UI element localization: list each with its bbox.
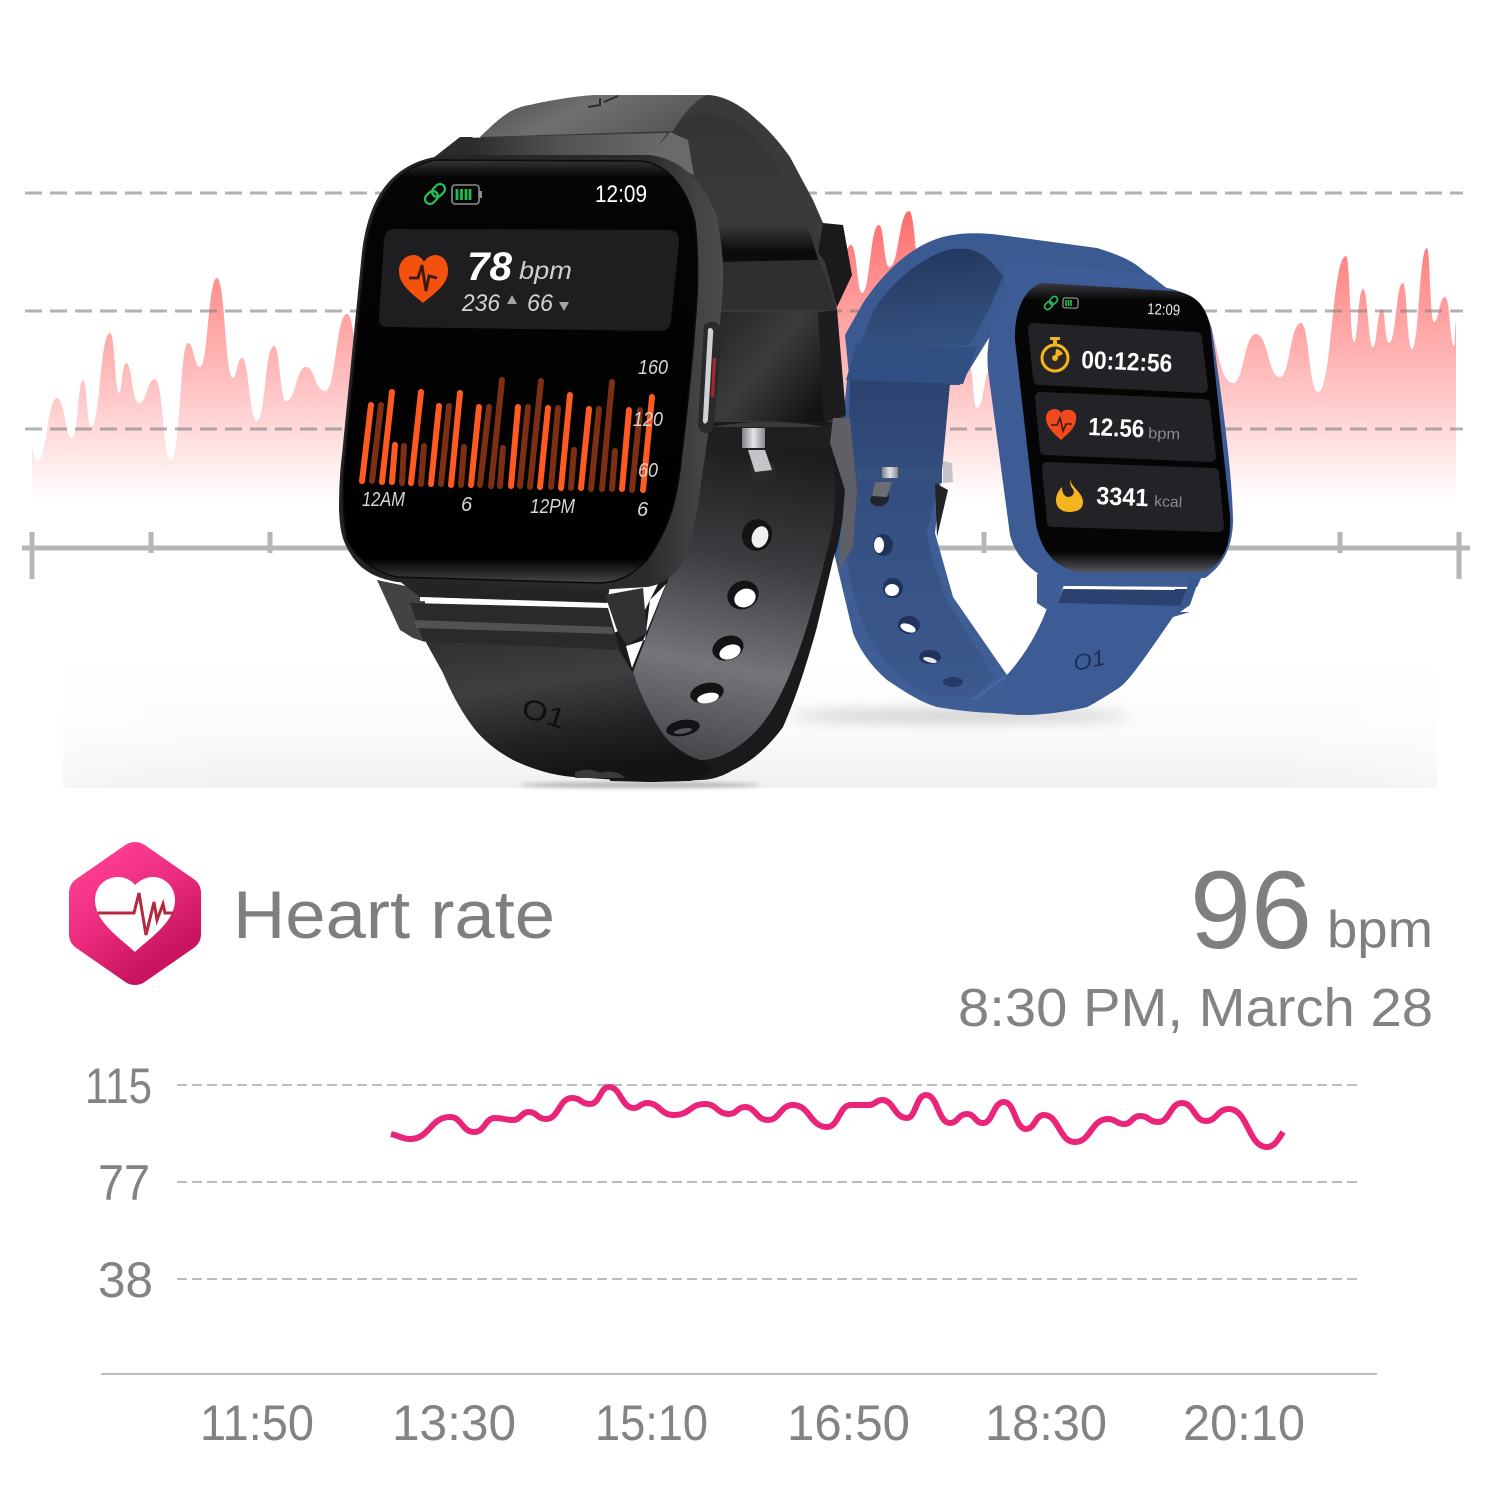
black strap: buckle holes	[665, 515, 777, 739]
heading: heart rate: Heart rate	[233, 877, 555, 953]
y axis labels: 77	[98, 1155, 150, 1211]
hexagon badge	[86, 859, 184, 968]
heart unit: bpm	[1148, 425, 1181, 443]
blue strap: front band below case	[990, 600, 1190, 715]
area: left section	[32, 278, 362, 502]
blue top lug	[1003, 262, 1175, 300]
blue strap: keeper loop	[846, 343, 977, 384]
x axis labels	[362, 489, 649, 521]
band gap	[420, 597, 608, 607]
strap bottom studs	[575, 770, 625, 778]
lug highlight	[414, 620, 614, 634]
x axis labels: 6	[461, 494, 473, 516]
panel: stopwatch	[1028, 323, 1208, 393]
x axis labels: 16:50	[787, 1395, 910, 1451]
status bar: link icon	[1043, 295, 1059, 311]
y axis labels: 60	[638, 460, 658, 482]
black strap: lower band outer	[600, 422, 846, 782]
side button	[698, 322, 722, 433]
black strap: inner surface	[673, 113, 818, 262]
blue case	[987, 280, 1233, 578]
blue lug and band	[1037, 570, 1205, 615]
reading: date and time: 8:30 PM, March 28	[958, 978, 1433, 1038]
y axis labels: 160	[638, 357, 668, 379]
blue strap: lower band	[835, 380, 1190, 715]
x axis labels: 15:10	[595, 1395, 708, 1451]
y axis labels	[633, 357, 668, 482]
arrow down	[559, 302, 569, 311]
black smartwatch	[339, 95, 857, 782]
black strap: lower band inner	[633, 448, 835, 760]
blue strap: upper band	[845, 233, 1172, 385]
x axis labels: 13:30	[392, 1395, 516, 1451]
y axis labels: 115	[85, 1058, 152, 1114]
lower lug band	[410, 603, 620, 650]
icon: flame	[1056, 478, 1083, 512]
reading: current bpm: bpm	[1327, 901, 1433, 959]
calories value: 3341	[1096, 482, 1149, 512]
status bar: battery	[452, 185, 482, 204]
white gap beside lug	[626, 584, 666, 668]
icon: heart	[399, 255, 448, 303]
lower right lug	[605, 588, 647, 645]
black strap: front band	[423, 637, 711, 782]
icon: heart rate badge	[86, 859, 184, 968]
max value: 236	[461, 290, 501, 317]
spring bar and tongue	[705, 422, 840, 486]
blue smartwatch	[835, 233, 1233, 715]
x axis labels: 20:10	[1183, 1395, 1305, 1451]
time axis with ticks	[22, 532, 1470, 579]
upper lug bar	[450, 133, 667, 158]
lower left lug	[377, 580, 425, 642]
chart: background heart rate area	[22, 193, 1470, 579]
y axis labels	[85, 1058, 153, 1308]
min value: 66	[527, 290, 554, 317]
x axis labels	[200, 1395, 1305, 1451]
x axis labels: 12AM	[362, 489, 405, 511]
upper lug left	[428, 137, 473, 162]
buckle frame	[830, 418, 857, 572]
status bar: battery	[1063, 298, 1078, 308]
status bar: time: 12:09	[1147, 301, 1181, 319]
calories unit: kcal	[1154, 493, 1183, 511]
black case	[339, 155, 723, 590]
lug underside	[398, 580, 610, 604]
floor shadow backdrop	[63, 660, 1437, 788]
pink heart rate line	[391, 1087, 1283, 1147]
arrow up	[507, 295, 517, 304]
stopwatch value: 00:12:56	[1081, 346, 1173, 378]
bpm value: 78	[467, 245, 513, 289]
y axis labels: 120	[633, 409, 663, 431]
icon: heart ecg	[409, 265, 437, 291]
status bar: time: 12:09	[595, 181, 647, 208]
black watch glass	[343, 160, 698, 583]
panel: bpm summary	[379, 229, 679, 331]
baseline axis	[101, 1373, 1377, 1375]
reading: current bpm: 96	[1190, 849, 1312, 972]
black strap: right rim	[818, 310, 846, 423]
icon: heart ecg	[1051, 418, 1072, 431]
dashed gridlines	[177, 1085, 1358, 1279]
x axis labels: 18:30	[985, 1395, 1107, 1451]
panel: heart rate	[1035, 392, 1216, 462]
black strap: keeper front	[720, 260, 837, 310]
status bar: link icon	[423, 182, 447, 206]
black strap: below keeper	[713, 312, 824, 423]
x axis labels: 11:50	[200, 1395, 314, 1451]
blue buckle	[857, 461, 953, 537]
blue strap: model mark: O1	[1071, 645, 1107, 676]
strap model mark: O1	[518, 692, 569, 735]
bar chart: daily heart rate	[362, 380, 652, 490]
ecg trace	[98, 893, 173, 935]
icon: stopwatch	[1042, 337, 1068, 371]
y axis labels: 38	[98, 1252, 153, 1308]
black strap: keeper end	[818, 223, 852, 307]
bpm unit: bpm	[519, 257, 572, 285]
blue strap: inner side	[860, 248, 1003, 345]
line chart: heart rate over day	[85, 1058, 1377, 1451]
area: right section	[1190, 248, 1456, 502]
x axis labels: 12PM	[530, 496, 575, 518]
panel: calories	[1042, 462, 1224, 532]
x axis labels: 6	[637, 499, 649, 521]
reading: current bpm	[1190, 849, 1433, 972]
blue watch glass	[1015, 283, 1230, 572]
black strap: upper band top surface	[480, 95, 707, 137]
white heart	[95, 877, 175, 952]
strap logo mark	[588, 96, 618, 107]
icon: heart	[1046, 409, 1076, 440]
upper lug bump	[650, 132, 694, 175]
blue strap: back surface and holes	[845, 380, 1007, 700]
heart value: 12.56	[1088, 413, 1145, 443]
area: middle section	[835, 211, 1010, 502]
black strap: upper band rim	[480, 95, 845, 432]
dashed gridlines	[25, 193, 1463, 429]
